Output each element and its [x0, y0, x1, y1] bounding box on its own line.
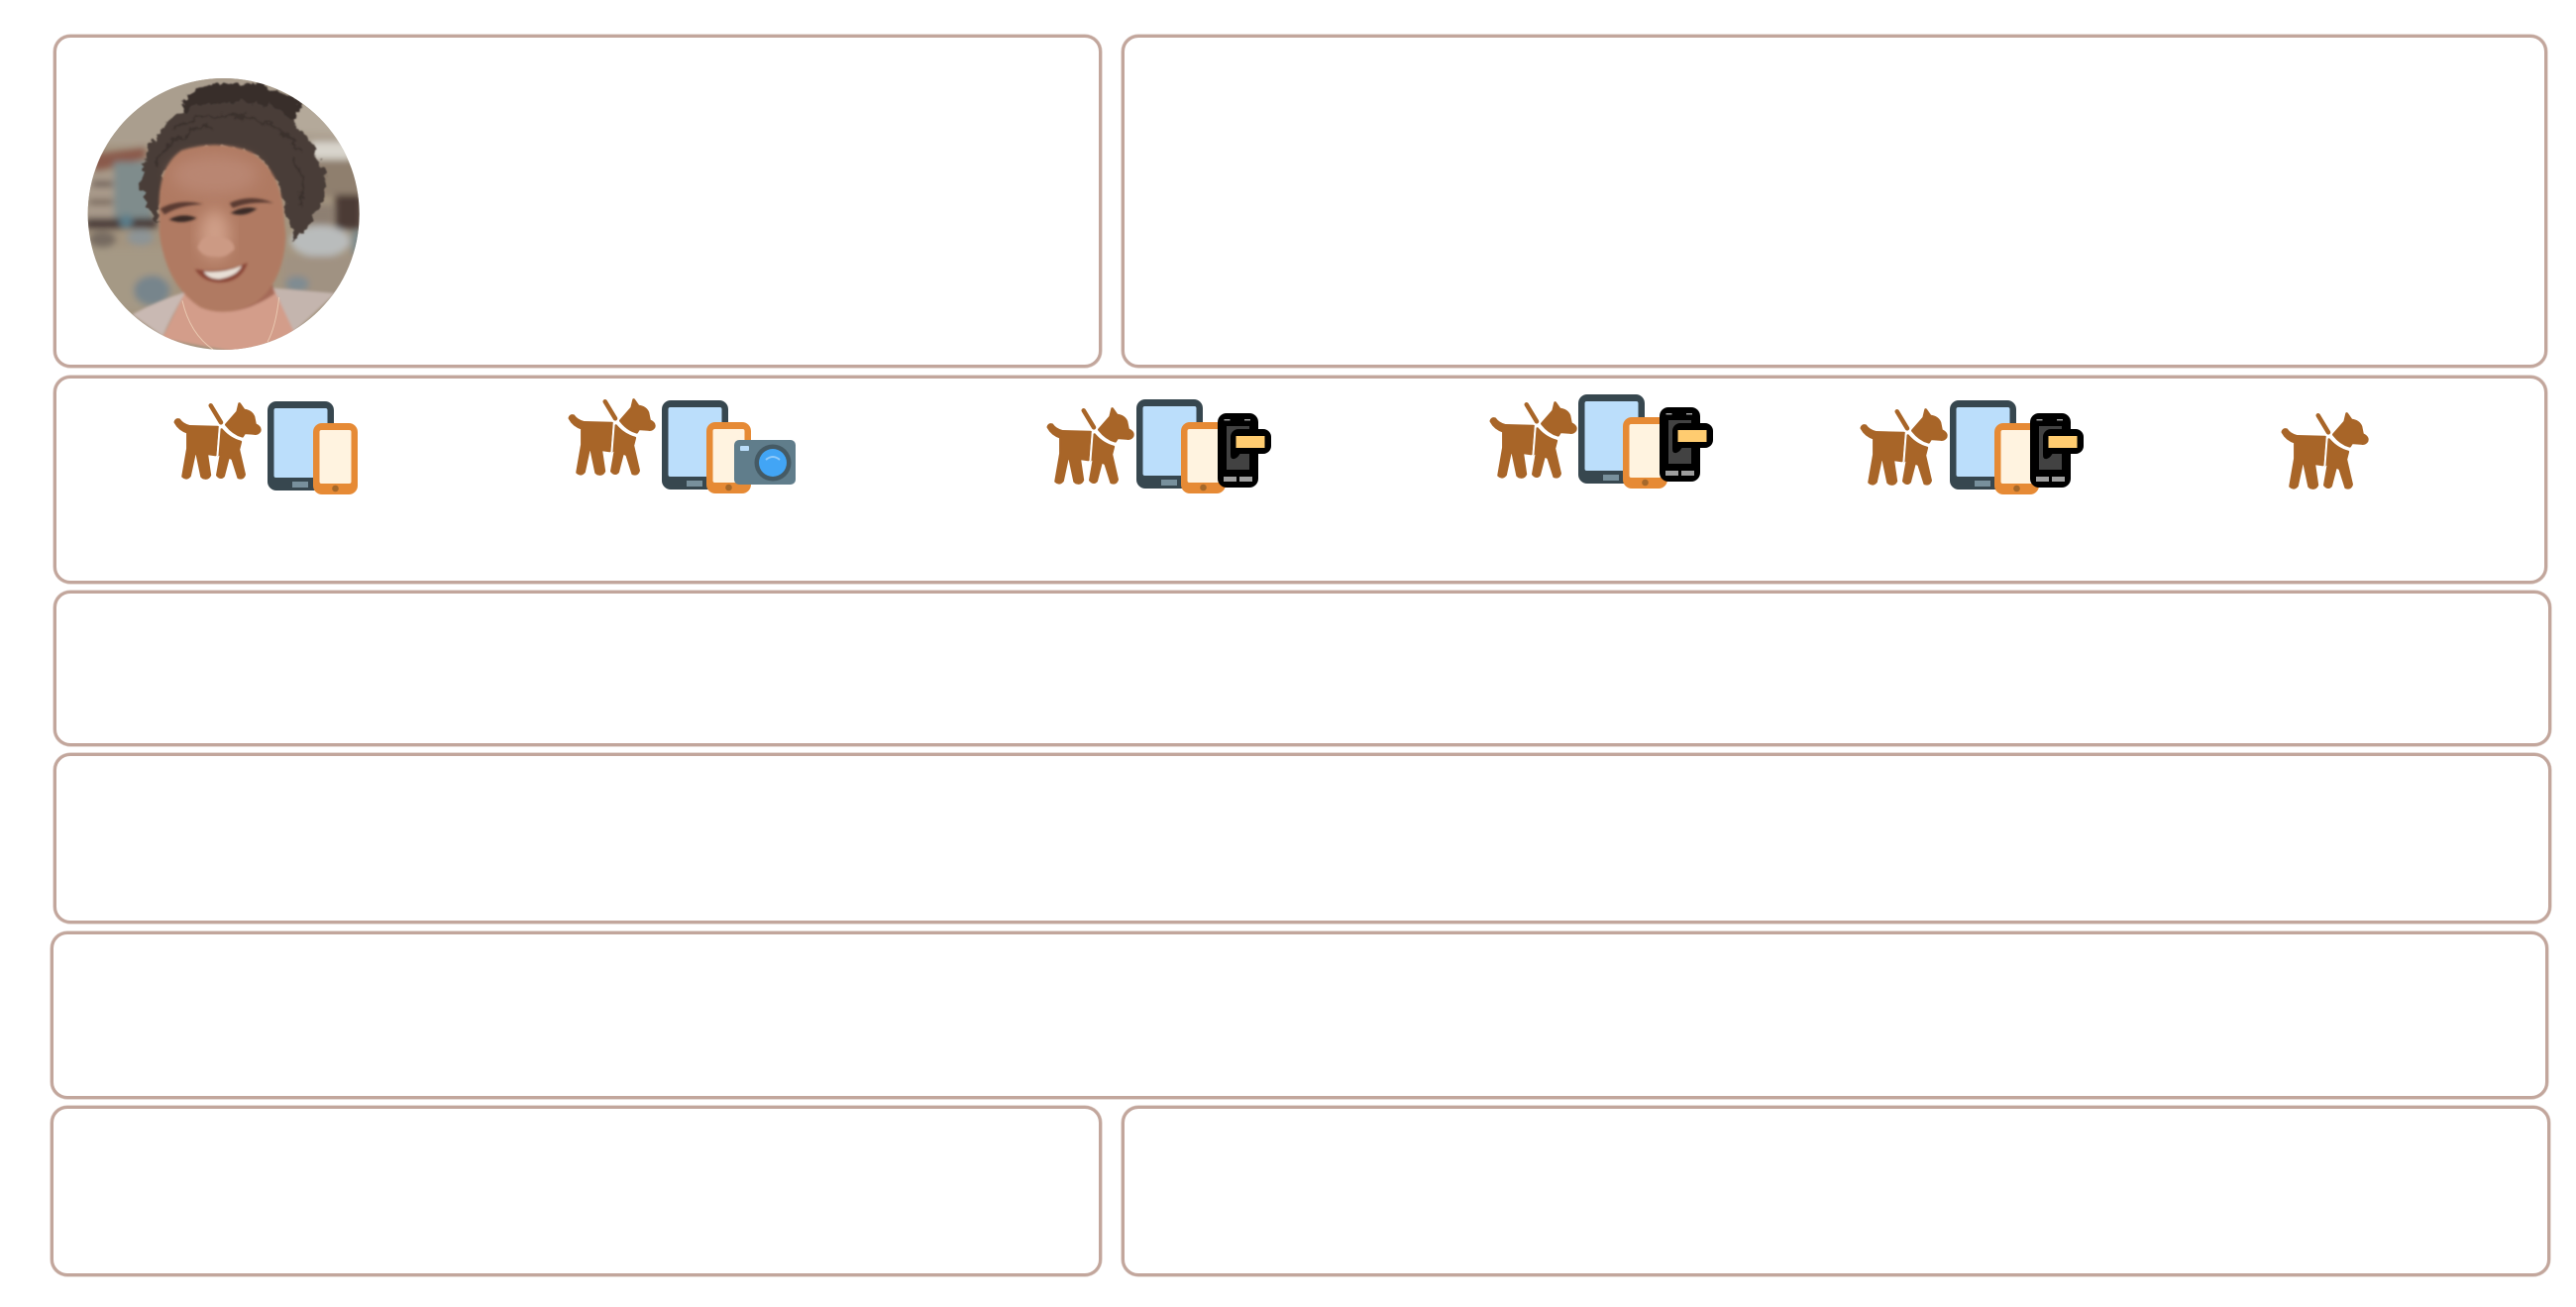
panel: profile — [54, 35, 1102, 368]
panel: top right — [1122, 35, 2547, 368]
icon: guide dog — [2283, 414, 2367, 488]
icon group 3: dog, tablet, phone, chat phone — [1048, 399, 1271, 493]
face — [160, 145, 285, 312]
icon: guide dog — [1491, 403, 1575, 477]
icon group 4: dog, tablet, phone, chat phone — [1491, 394, 1713, 489]
icon: smartphone — [313, 423, 358, 494]
portrait photo — [87, 78, 360, 350]
icon: tablet — [268, 401, 334, 490]
panel: icon row — [54, 376, 2547, 584]
icon: tablet — [1136, 399, 1203, 489]
icon: guide dog — [1862, 410, 1946, 484]
panel: row 4 — [54, 753, 2551, 924]
icon: smartphone — [706, 422, 751, 493]
icon group 1: dog, tablet, phone — [175, 401, 358, 494]
icon: camera — [734, 440, 796, 485]
icon group 5: dog, tablet, phone, chat phone — [1862, 400, 2084, 494]
icon: chat phone — [1218, 413, 1271, 488]
icon: tablet — [1950, 400, 2016, 490]
icon: chat phone — [1660, 407, 1713, 482]
icon: chat phone — [2030, 413, 2084, 488]
panel: row 5 — [51, 931, 2548, 1099]
icon: guide dog — [1048, 409, 1132, 483]
icon row — [174, 394, 2369, 494]
icon: tablet — [1578, 394, 1645, 484]
icon: guide dog — [570, 400, 654, 474]
icon: smartphone — [1181, 422, 1226, 493]
hair — [141, 82, 325, 241]
icon: smartphone — [1994, 423, 2039, 494]
icon group 6: dog only — [2283, 414, 2367, 488]
icon: guide dog — [175, 404, 260, 478]
icon: tablet — [662, 400, 728, 490]
icon group 2: dog, tablet, phone, camera — [570, 400, 796, 493]
top — [132, 292, 185, 336]
neck and chest — [161, 288, 295, 354]
panel: bottom left — [51, 1106, 1102, 1276]
panel: row 3 — [54, 591, 2551, 746]
panel: bottom right — [1122, 1106, 2550, 1276]
icon: smartphone — [1623, 417, 1667, 489]
